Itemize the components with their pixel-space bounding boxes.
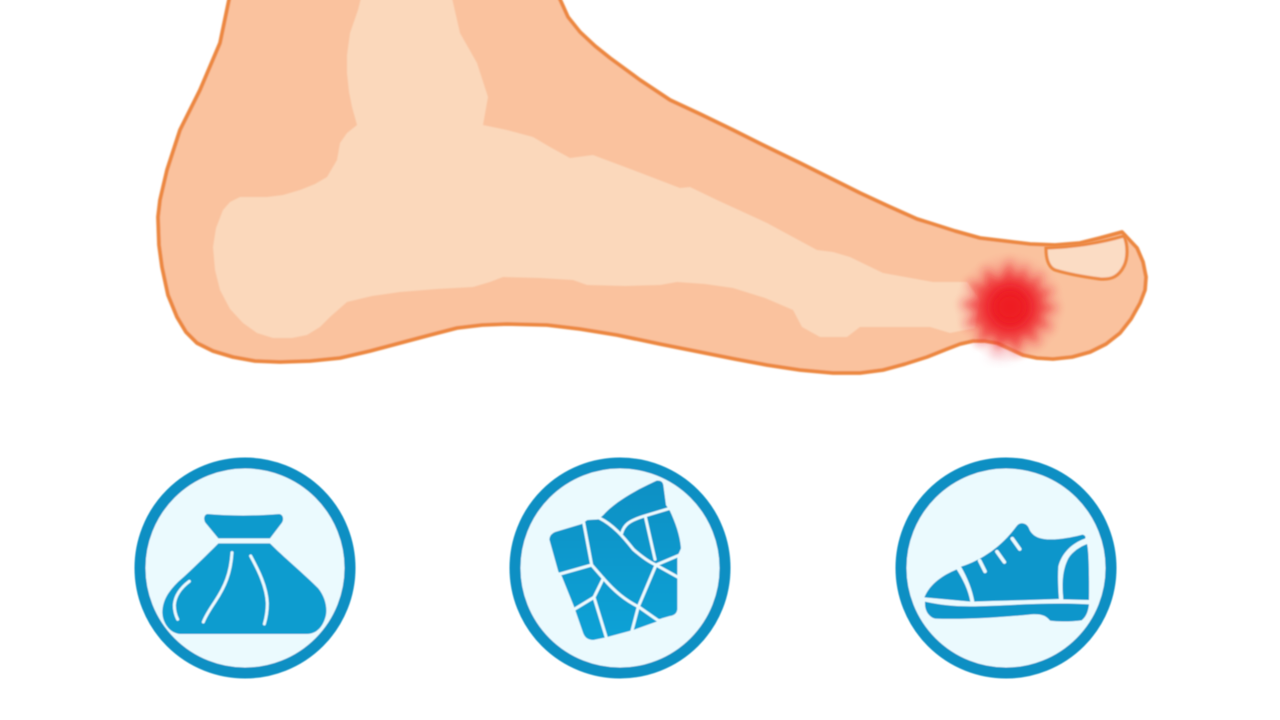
haze below pain point [986,350,1014,362]
icon: bandage wrap [515,463,725,673]
foot outline and skin [158,0,1146,373]
foot bones lighter area [213,0,980,338]
icon: ice pack [140,463,350,673]
icon: shoe [901,463,1111,673]
foot [158,0,1146,373]
pain point [954,251,1066,363]
toenail [1046,236,1127,279]
